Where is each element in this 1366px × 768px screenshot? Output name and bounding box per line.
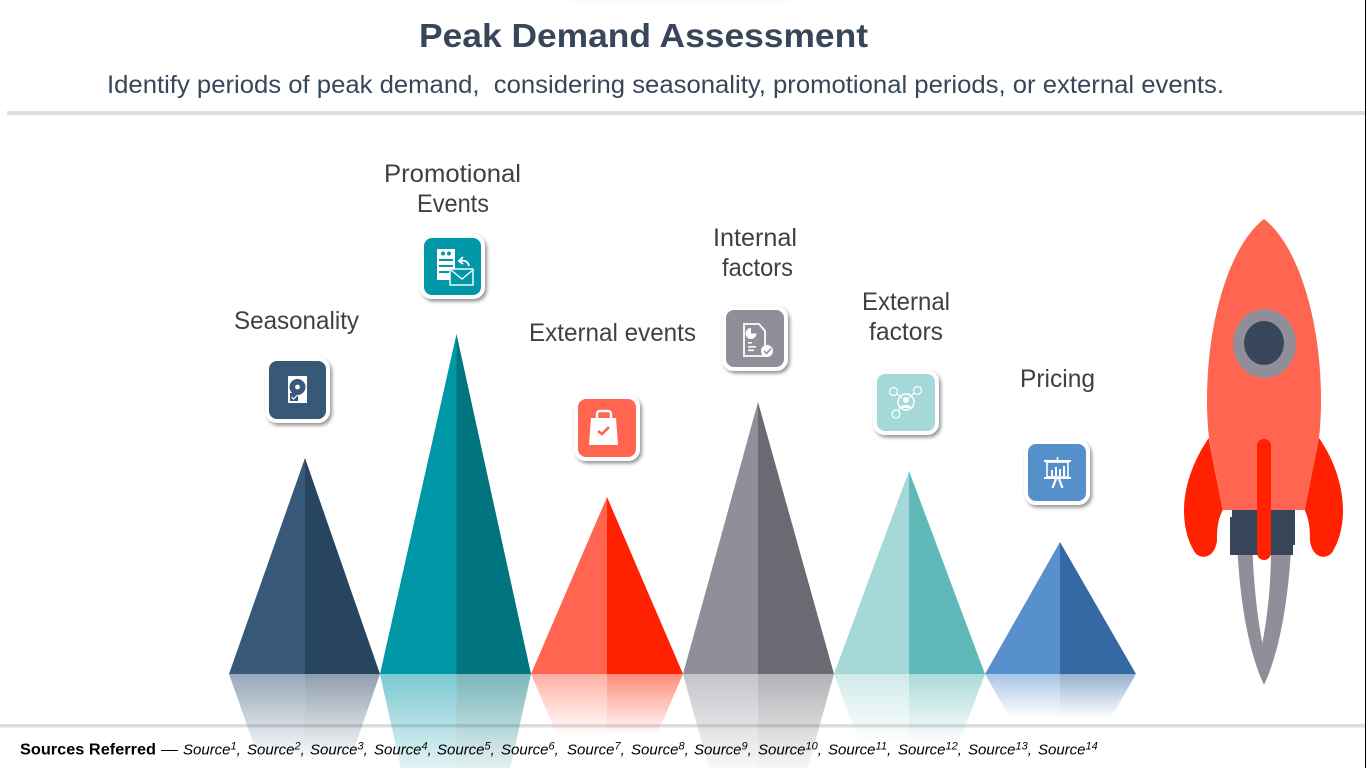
rocket window	[1233, 309, 1296, 378]
label: Pricing: Pricing	[1020, 365, 1095, 393]
sources list: Source	[501, 742, 549, 758]
sources list: ,	[428, 742, 432, 758]
sources list: 6	[549, 740, 556, 752]
label: Promotional Events	[384, 160, 521, 218]
icon: hard disk on navy tile	[267, 359, 328, 421]
icon: rocket	[1184, 219, 1343, 685]
sources list: ,	[748, 742, 752, 758]
peak: External factors	[834, 471, 985, 674]
sources list: Source	[437, 742, 485, 758]
sources footer: —	[161, 742, 178, 758]
sources list: ,	[301, 742, 305, 758]
sources list: ,	[621, 742, 625, 758]
sources list: 9	[742, 740, 748, 752]
reflections of the peaks	[229, 674, 1136, 768]
sources list: Source	[1038, 742, 1086, 758]
sources list: Source	[694, 742, 742, 758]
sources list: ,	[887, 742, 891, 758]
sources list: ,	[1028, 742, 1032, 758]
sources list: 10	[806, 740, 819, 752]
sources list: ,	[491, 742, 495, 758]
rocket nozzle	[1230, 510, 1295, 555]
label: External factors: factors	[869, 318, 943, 346]
sources list: 7	[615, 740, 622, 752]
sources list: ,	[958, 742, 962, 758]
peak: Promotional Events	[380, 334, 531, 674]
rocket centre stripe	[1257, 439, 1271, 560]
sources list: ,	[555, 742, 559, 758]
label: External events: External events	[529, 319, 696, 347]
sources list: 11	[876, 740, 887, 752]
icon: server and mail on teal tile	[422, 236, 483, 297]
sources list: Source	[310, 742, 358, 758]
label: Internal factors: factors	[722, 254, 793, 282]
label: External factors	[862, 288, 950, 346]
rocket body	[1207, 219, 1321, 510]
sources list: Source	[828, 742, 876, 758]
label: Promotional Events: Events	[417, 190, 489, 218]
sources list: 12	[946, 740, 958, 752]
icon: shopping bag on coral tile	[576, 397, 638, 459]
rocket flame	[1238, 555, 1291, 685]
icon: presentation board on blue tile	[1026, 442, 1088, 503]
label: Promotional Events: Promotional	[384, 160, 521, 188]
peak: External events	[531, 497, 683, 674]
sources list: Source	[247, 742, 295, 758]
peak: Pricing	[985, 542, 1136, 674]
sources list: ,	[237, 742, 241, 758]
rocket right fin	[1305, 438, 1343, 557]
peak: Internal factors	[683, 402, 834, 674]
sources list: ,	[818, 742, 822, 758]
sources list: Source	[567, 742, 615, 758]
label: Seasonality: Seasonality	[234, 307, 359, 335]
sources list: 1	[231, 740, 237, 752]
sources list: 5	[485, 740, 492, 752]
icon: connected people on light teal tile	[875, 372, 937, 433]
sources list: Source	[631, 742, 679, 758]
sources list: 8	[679, 740, 686, 752]
sources list: Source	[758, 742, 806, 758]
sources list: 4	[422, 740, 428, 752]
icon: report with check on grey tile	[724, 308, 786, 369]
sources list: ,	[685, 742, 689, 758]
sources list: Source	[898, 742, 946, 758]
peak: Seasonality	[229, 458, 380, 674]
sources list: 2	[294, 740, 301, 752]
sources list: Source	[183, 742, 231, 758]
sources list: Source	[374, 742, 422, 758]
sources list: 14	[1086, 740, 1098, 752]
label: External factors: External	[862, 288, 950, 316]
rocket left fin	[1184, 438, 1223, 557]
subtitle: Identify periods of peak demand, considering seasonality, promotional periods, or external events.	[107, 71, 1224, 99]
sources list: 3	[358, 740, 365, 752]
sources list: 13	[1016, 740, 1029, 752]
sources list: ,	[364, 742, 368, 758]
sources list: Source	[968, 742, 1016, 758]
label: Internal factors	[713, 224, 797, 282]
sources footer: Sources Referred	[20, 742, 156, 758]
label: Internal factors: Internal	[713, 224, 797, 252]
title: Peak Demand Assessment	[419, 17, 868, 54]
